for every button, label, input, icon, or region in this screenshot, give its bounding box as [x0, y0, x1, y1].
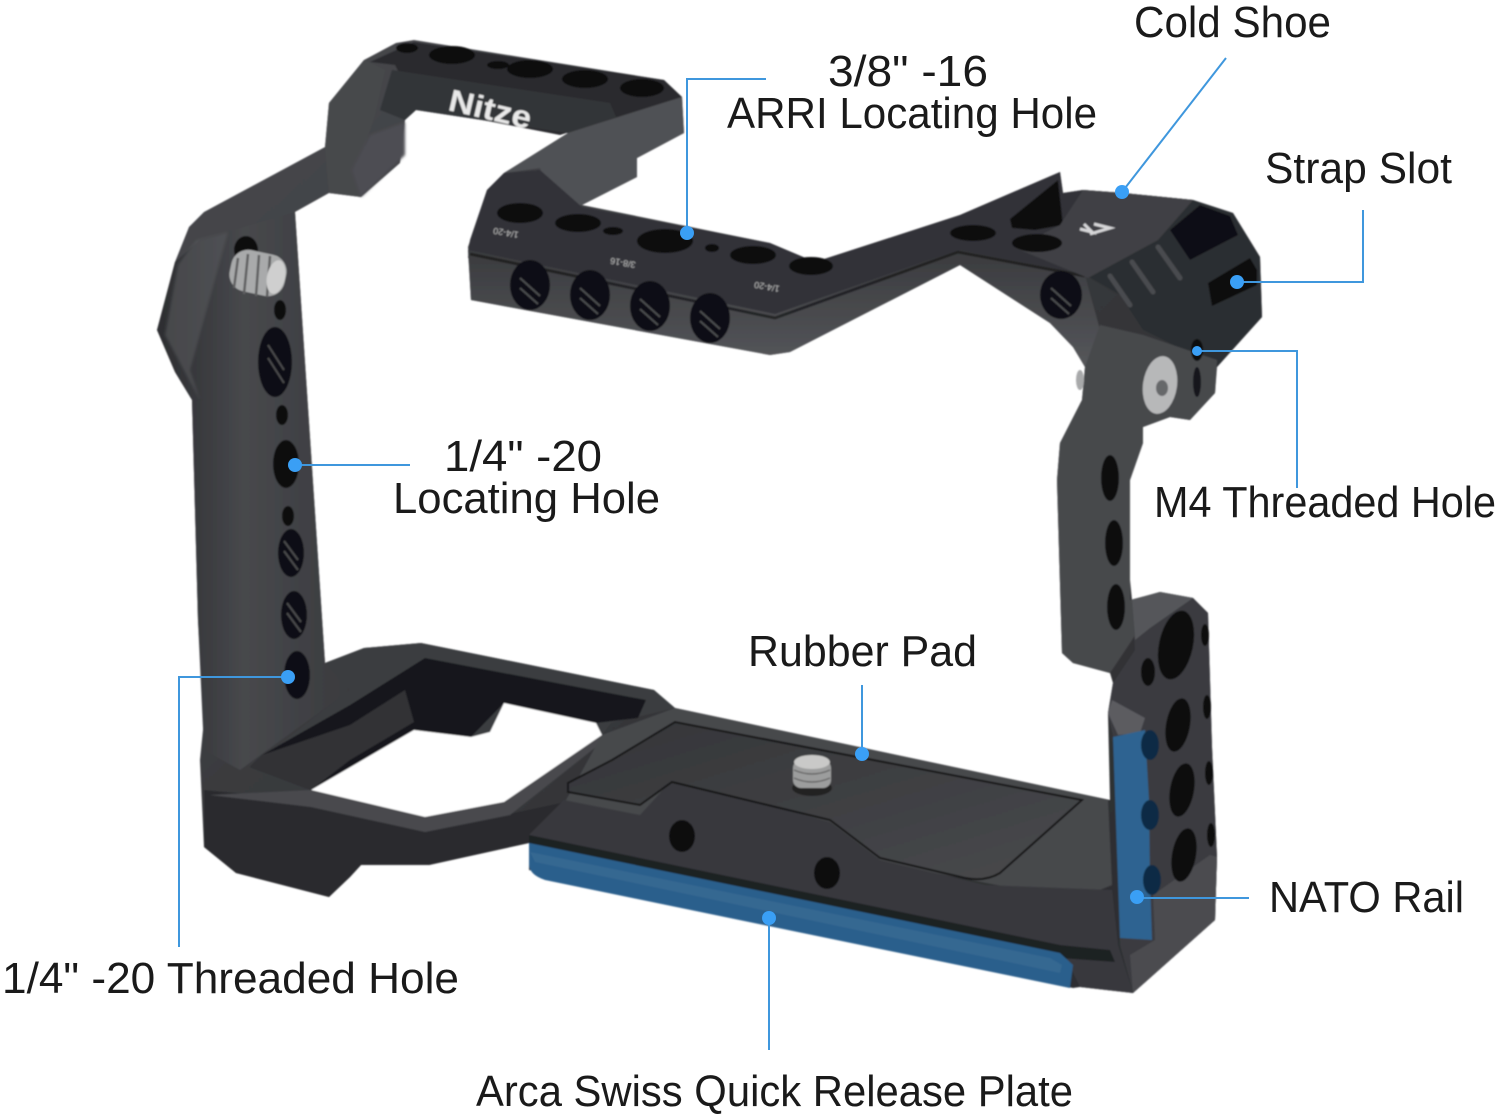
right plate slope: [1132, 592, 1193, 640]
right upright holes: [1101, 339, 1203, 630]
right plate: [1108, 592, 1217, 993]
callout: 3/8" -16 ARRI Locating Hole: 3/8" -16: [828, 47, 988, 96]
left upright face: [157, 212, 350, 770]
block top: [1015, 190, 1193, 278]
cold shoe block: [1085, 200, 1262, 367]
right upright top: [1057, 325, 1217, 673]
callout: 1/4" -20 Locating Hole: Locating Hole: [393, 474, 660, 523]
callout: M4 Threaded Hole: [1154, 346, 1496, 527]
right plate holes: [1141, 607, 1215, 884]
front plate slope: [504, 97, 684, 210]
thumb screw: [1076, 354, 1181, 416]
callout: 3/8" -16 ARRI Locating Hole: [680, 47, 1097, 240]
callout: Cold Shoe: [1115, 0, 1331, 199]
front plate threaded holes: [510, 260, 1082, 343]
front plate top surface: [468, 170, 1193, 320]
engraved thread marks: 1/4-20: [753, 280, 780, 294]
Nitze logo: Nitze: [445, 83, 535, 136]
top arm surface: [370, 42, 682, 135]
left upright chamfer: [165, 232, 228, 400]
mounting screw: [792, 755, 832, 796]
callout: 1/4" -20 Locating Hole: 1/4" -20: [444, 432, 602, 481]
base block top: [565, 708, 1112, 900]
grip inner ledge: [250, 690, 414, 790]
callout: NATO Rail: NATO Rail: [1269, 873, 1464, 922]
strap slot opening: [1208, 258, 1257, 306]
callout: 3/8" -16 ARRI Locating Hole: ARRI Locating Hole: [727, 89, 1097, 138]
callout: Strap Slot: Strap Slot: [1265, 144, 1452, 193]
callout: Rubber Pad: Rubber Pad: [748, 627, 977, 676]
blue Arca plate: [529, 843, 1073, 988]
right lower face: [1130, 855, 1217, 993]
bump: [352, 122, 405, 197]
top arm chamfer: [325, 60, 385, 197]
callout: Arca Swiss Quick Release Plate: [476, 911, 1073, 1116]
callout: NATO Rail: [1130, 873, 1464, 922]
rail dark side holes: [1141, 730, 1161, 895]
cold shoe notch: [1010, 180, 1063, 230]
callout: 1/4" -20 Threaded Hole: [2, 670, 459, 1003]
lower grip top: [250, 643, 675, 817]
engraved thread marks: [492, 226, 780, 294]
blue plate shading: [530, 852, 1062, 973]
callout: Strap Slot: [1230, 144, 1452, 289]
left upright holes: [234, 236, 310, 699]
front plate top holes: [497, 203, 1062, 275]
chevron mark: [1080, 224, 1110, 234]
grip hole: [311, 703, 602, 817]
callout: Rubber Pad: [748, 627, 977, 761]
cage silhouette: [157, 40, 1262, 993]
block ribs: [1110, 247, 1180, 305]
rubber pad: [568, 722, 1082, 879]
callout: 1/4" -20 Locating Hole: [288, 432, 660, 523]
side holes: [669, 820, 840, 889]
grip corner top strip: [210, 735, 611, 832]
front plate dark edge: [470, 252, 1085, 318]
camera cage: [157, 40, 1262, 993]
grip inner wall: [250, 658, 646, 790]
grip lower front: [204, 790, 565, 897]
strap slot upper: [1170, 205, 1238, 260]
left stud screw: [226, 247, 290, 299]
callout: 1/4" -20 Threaded Hole: 1/4" -20 Threaded Hole: [2, 954, 459, 1003]
engraved thread marks: 1/4-20: [492, 226, 519, 240]
base block lower groove: [529, 835, 1115, 962]
base block side: [529, 782, 1133, 993]
front plate face: [468, 250, 1100, 367]
top arm holes: [396, 43, 664, 97]
engraved thread marks: 3/8-16: [609, 256, 636, 270]
top arm inner wall: [380, 70, 616, 133]
right plate notch: [1108, 700, 1145, 735]
blue NATO rail: [1113, 730, 1152, 940]
callout: Arca Swiss Quick Release Plate: Arca Swiss Quick Release Plate: [476, 1067, 1073, 1116]
